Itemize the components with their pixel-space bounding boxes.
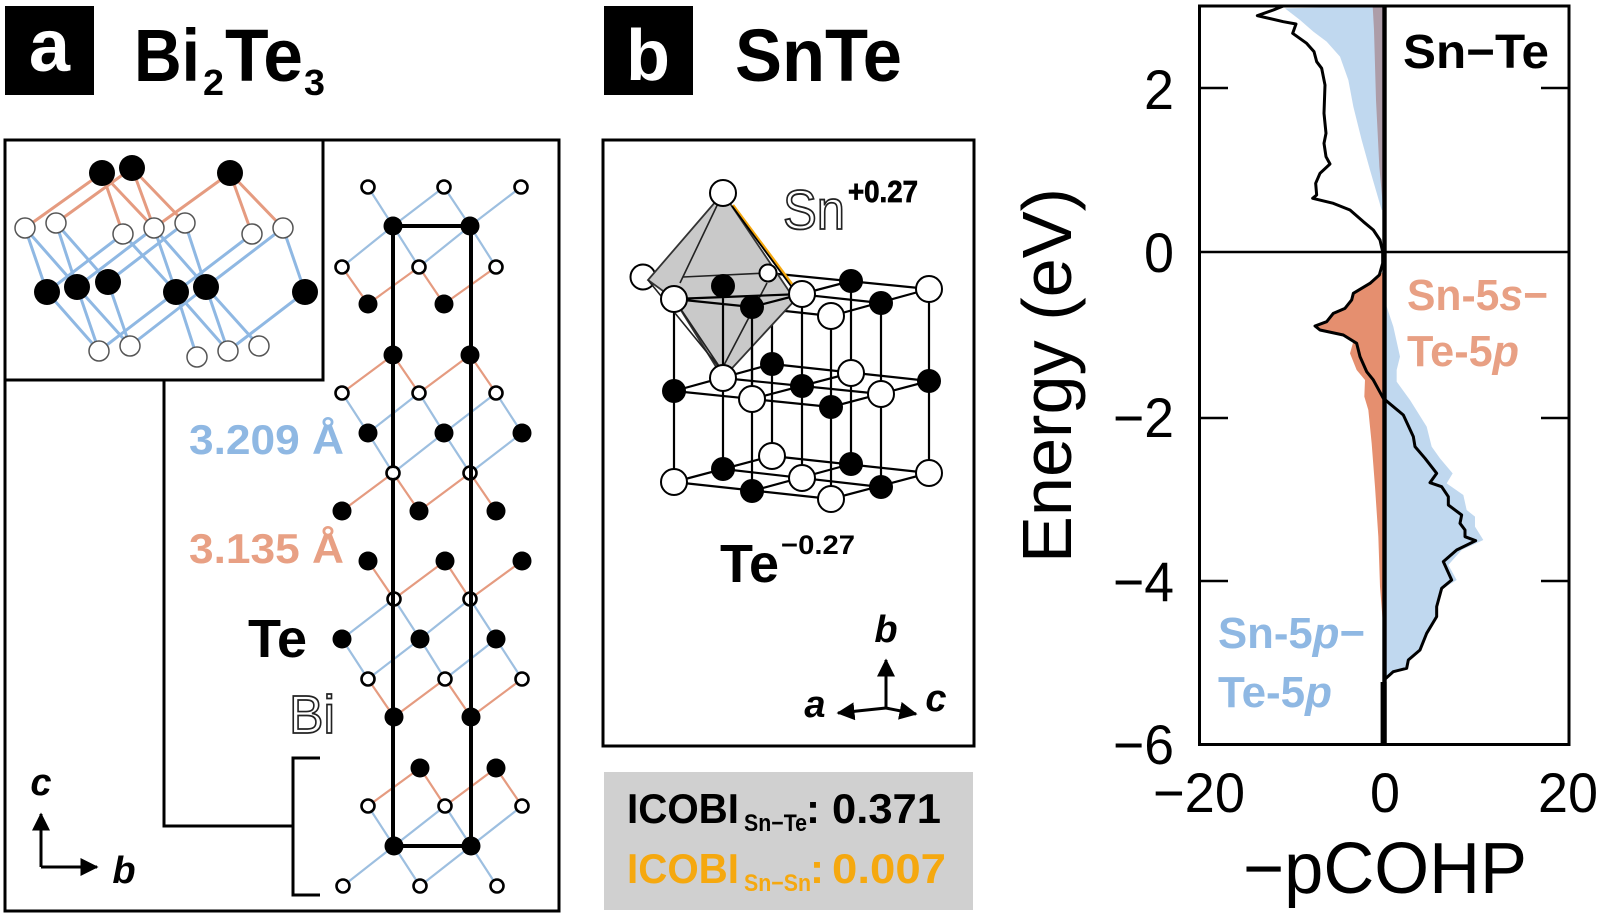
label: Sn-5p Te-5p: [1218, 609, 1365, 717]
x tick labels: 20: [1538, 761, 1598, 824]
chart: pCOHP: [1008, 6, 1598, 909]
panel label: b: b: [626, 16, 670, 96]
ICOBI Sn-Te value: [627, 785, 941, 837]
ICOBI Sn-Sn value: 0.007: [832, 845, 946, 892]
y tick labels: −6: [1113, 713, 1174, 776]
heading: Bi2Te3: [134, 14, 325, 103]
atom label: Te charge: [720, 530, 855, 594]
axes: a, b, c: [804, 609, 947, 726]
ICOBI Sn-Te value: 0.371: [832, 785, 941, 832]
crystal lattice: Bi2Te3 unit cell: [332, 180, 532, 892]
x tick labels: 0: [1370, 761, 1400, 824]
y tick labels: 2: [1144, 58, 1174, 121]
atom label: Sn charge: [783, 174, 918, 241]
panel label: b: [604, 6, 693, 96]
axes: a, b, c: b: [874, 609, 898, 651]
ICOBI Sn-Te value: Sn−Te: [744, 810, 807, 837]
ICOBI Sn-Te value: :: [806, 785, 820, 832]
atom label: Te charge: −0.27: [781, 530, 855, 560]
heading: SnTe: SnTe: [735, 14, 902, 97]
brown strip: [1373, 6, 1383, 203]
x tick labels: [1153, 761, 1598, 824]
ICOBI Sn-Sn value: ICOBI: [627, 845, 739, 892]
atom label: Bi: Bi: [289, 685, 335, 745]
axes: a, b, c: a: [804, 684, 826, 726]
x tick labels: −20: [1153, 761, 1245, 824]
blue filled region above Fermi level: [1285, 6, 1383, 210]
ICOBI Sn-Sn value: Sn−Sn: [744, 870, 811, 897]
orange filled region Sn-5s Te-5p: [1315, 272, 1383, 620]
ICOBI Sn-Sn value: :: [810, 845, 824, 892]
label: Sn-5s Te-5p: [1407, 271, 1548, 376]
atom label: Te: Te: [248, 609, 307, 669]
heading: Bi2Te3: 3: [304, 62, 325, 103]
atom label: Sn charge: +0.27: [848, 174, 918, 209]
blue filled region Sn-5p Te-5p: [1384, 302, 1483, 680]
y tick labels: 0: [1144, 221, 1174, 284]
x axis title: −pCOHP: [1243, 829, 1527, 909]
octahedron: [630, 193, 802, 400]
atom label: Sn charge: Sn: [783, 178, 845, 241]
label: Sn-5p Te-5p: Sn-5p−: [1218, 609, 1365, 658]
y tick labels: −4: [1113, 550, 1174, 613]
ICOBI Sn-Sn value: [627, 845, 946, 897]
label: Sn-5s Te-5p: Sn-5s−: [1407, 271, 1548, 320]
ICOBI Sn-Te value: ICOBI: [627, 785, 739, 832]
total COHP curve: [1257, 6, 1476, 680]
panel label: a: a: [29, 4, 71, 87]
panel: SnTe structure: [603, 140, 974, 746]
label: Sn-5p Te-5p: Te-5p: [1218, 668, 1332, 717]
bond length: 3.209 A: 3.209 Å: [189, 416, 344, 463]
heading: Bi2Te3: Bi: [134, 14, 200, 97]
y tick labels: [1113, 58, 1174, 776]
atom label: Te charge: Te: [720, 534, 779, 594]
curves area: [1257, 6, 1483, 680]
inset: Bi2Te3 coordination: [5, 140, 323, 380]
axes: a, b, c: c: [925, 678, 947, 720]
panel: Bi2Te3 structure: [5, 140, 559, 911]
frame and axes: [1200, 6, 1569, 744]
y tick labels: −2: [1113, 386, 1174, 449]
crystal lattice: SnTe rock salt: [630, 180, 942, 512]
back lines and verticals: [674, 273, 929, 499]
y axis title: Energy (eV): [1008, 188, 1086, 563]
axes: c, b: [30, 762, 136, 892]
axes: c, b: b: [112, 850, 136, 892]
heading: Bi2Te3: 2: [203, 62, 224, 103]
panel label: a: [5, 4, 94, 95]
ICOBI box: [604, 772, 973, 910]
bracket connecting inset to layer: [164, 380, 320, 895]
heading: Bi2Te3: Te: [225, 14, 303, 97]
axes: c, b: c: [30, 762, 52, 804]
label: Sn-Te: Sn−Te: [1403, 26, 1549, 79]
label: Sn-5s Te-5p: Te-5p: [1407, 327, 1519, 376]
bond length: 3.135 A: 3.135 Å: [189, 525, 344, 572]
